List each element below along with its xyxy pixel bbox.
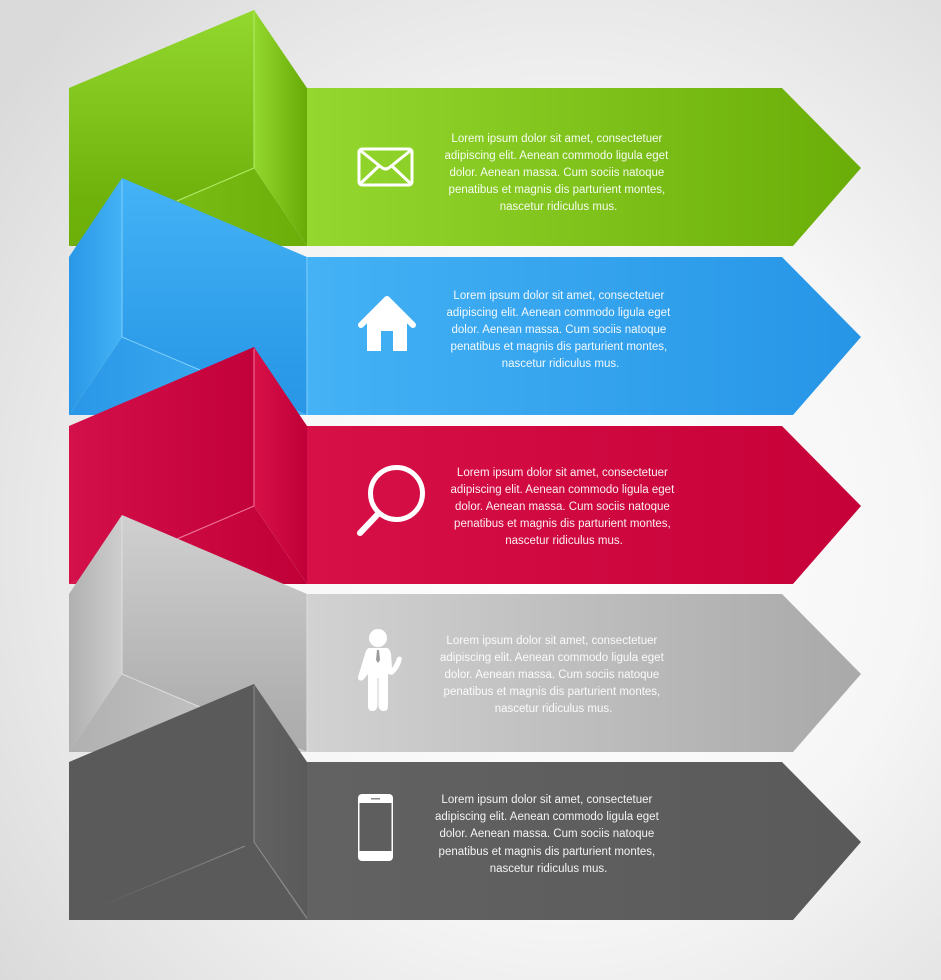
text: gray: Lorem ipsum dolor sit amet, consectetuer bbox=[446, 635, 658, 647]
text: blue: adipiscing elit. Aenean commodo ligula eget bbox=[447, 307, 671, 319]
text: green: dolor. Aenean massa. Cum sociis natoque bbox=[450, 167, 664, 179]
panel: gray arrow bbox=[69, 515, 861, 752]
text: dark: dolor. Aenean massa. Cum sociis natoque bbox=[440, 828, 654, 840]
text: green: penatibus et magnis dis parturient montes, bbox=[449, 184, 665, 196]
arrow body: blue bbox=[307, 257, 861, 415]
text: gray: dolor. Aenean massa. Cum sociis natoque bbox=[444, 669, 659, 681]
text: dark: adipiscing elit. Aenean commodo ligula eget bbox=[435, 811, 660, 823]
panel: green arrow bbox=[69, 10, 861, 246]
arrow body: gray bbox=[307, 594, 861, 752]
text: green: adipiscing elit. Aenean commodo ligula eget bbox=[445, 150, 669, 162]
icon: smartphone bbox=[358, 794, 393, 861]
text: gray: adipiscing elit. Aenean commodo ligula eget bbox=[440, 652, 665, 664]
panel: red arrow bbox=[69, 347, 861, 584]
text: dark: penatibus et magnis dis parturient montes, bbox=[439, 846, 655, 858]
panel: blue arrow bbox=[69, 178, 861, 415]
fold: green bbox=[69, 10, 307, 246]
text: green: Lorem ipsum dolor sit amet, consectetuer bbox=[451, 133, 663, 145]
text: blue: Lorem ipsum dolor sit amet, consectetuer bbox=[453, 290, 665, 302]
arrow body: red bbox=[307, 426, 861, 584]
text: blue: penatibus et magnis dis parturient montes, bbox=[451, 341, 667, 353]
text: red: nascetur ridiculus mus. bbox=[505, 535, 623, 547]
icon: envelope bbox=[359, 149, 412, 185]
text: red: adipiscing elit. Aenean commodo ligula eget bbox=[451, 484, 675, 496]
fold: dark bbox=[69, 684, 307, 920]
arrow body: green bbox=[307, 88, 861, 246]
text: red: Lorem ipsum dolor sit amet, consectetuer bbox=[457, 467, 668, 479]
panel: dark arrow bbox=[69, 684, 861, 920]
text: dark: nascetur ridiculus mus. bbox=[490, 863, 607, 875]
text: blue: dolor. Aenean massa. Cum sociis natoque bbox=[452, 324, 666, 336]
text: red: dolor. Aenean massa. Cum sociis natoque bbox=[455, 501, 670, 513]
icon: magnifying glass bbox=[360, 468, 422, 533]
text: dark: Lorem ipsum dolor sit amet, consectetuer bbox=[441, 794, 653, 806]
icon: house bbox=[361, 299, 413, 351]
text: gray: penatibus et magnis dis parturient montes, bbox=[444, 686, 660, 698]
fold: gray bbox=[69, 515, 307, 752]
text: gray: nascetur ridiculus mus. bbox=[495, 703, 612, 715]
icon: businessman bbox=[358, 629, 402, 711]
fold: red bbox=[69, 347, 307, 584]
text: red: penatibus et magnis dis parturient montes, bbox=[454, 518, 671, 530]
arrow body: dark bbox=[307, 762, 861, 920]
text: blue: nascetur ridiculus mus. bbox=[502, 358, 619, 370]
fold: blue bbox=[69, 178, 307, 415]
text: green: nascetur ridiculus mus. bbox=[500, 201, 617, 213]
